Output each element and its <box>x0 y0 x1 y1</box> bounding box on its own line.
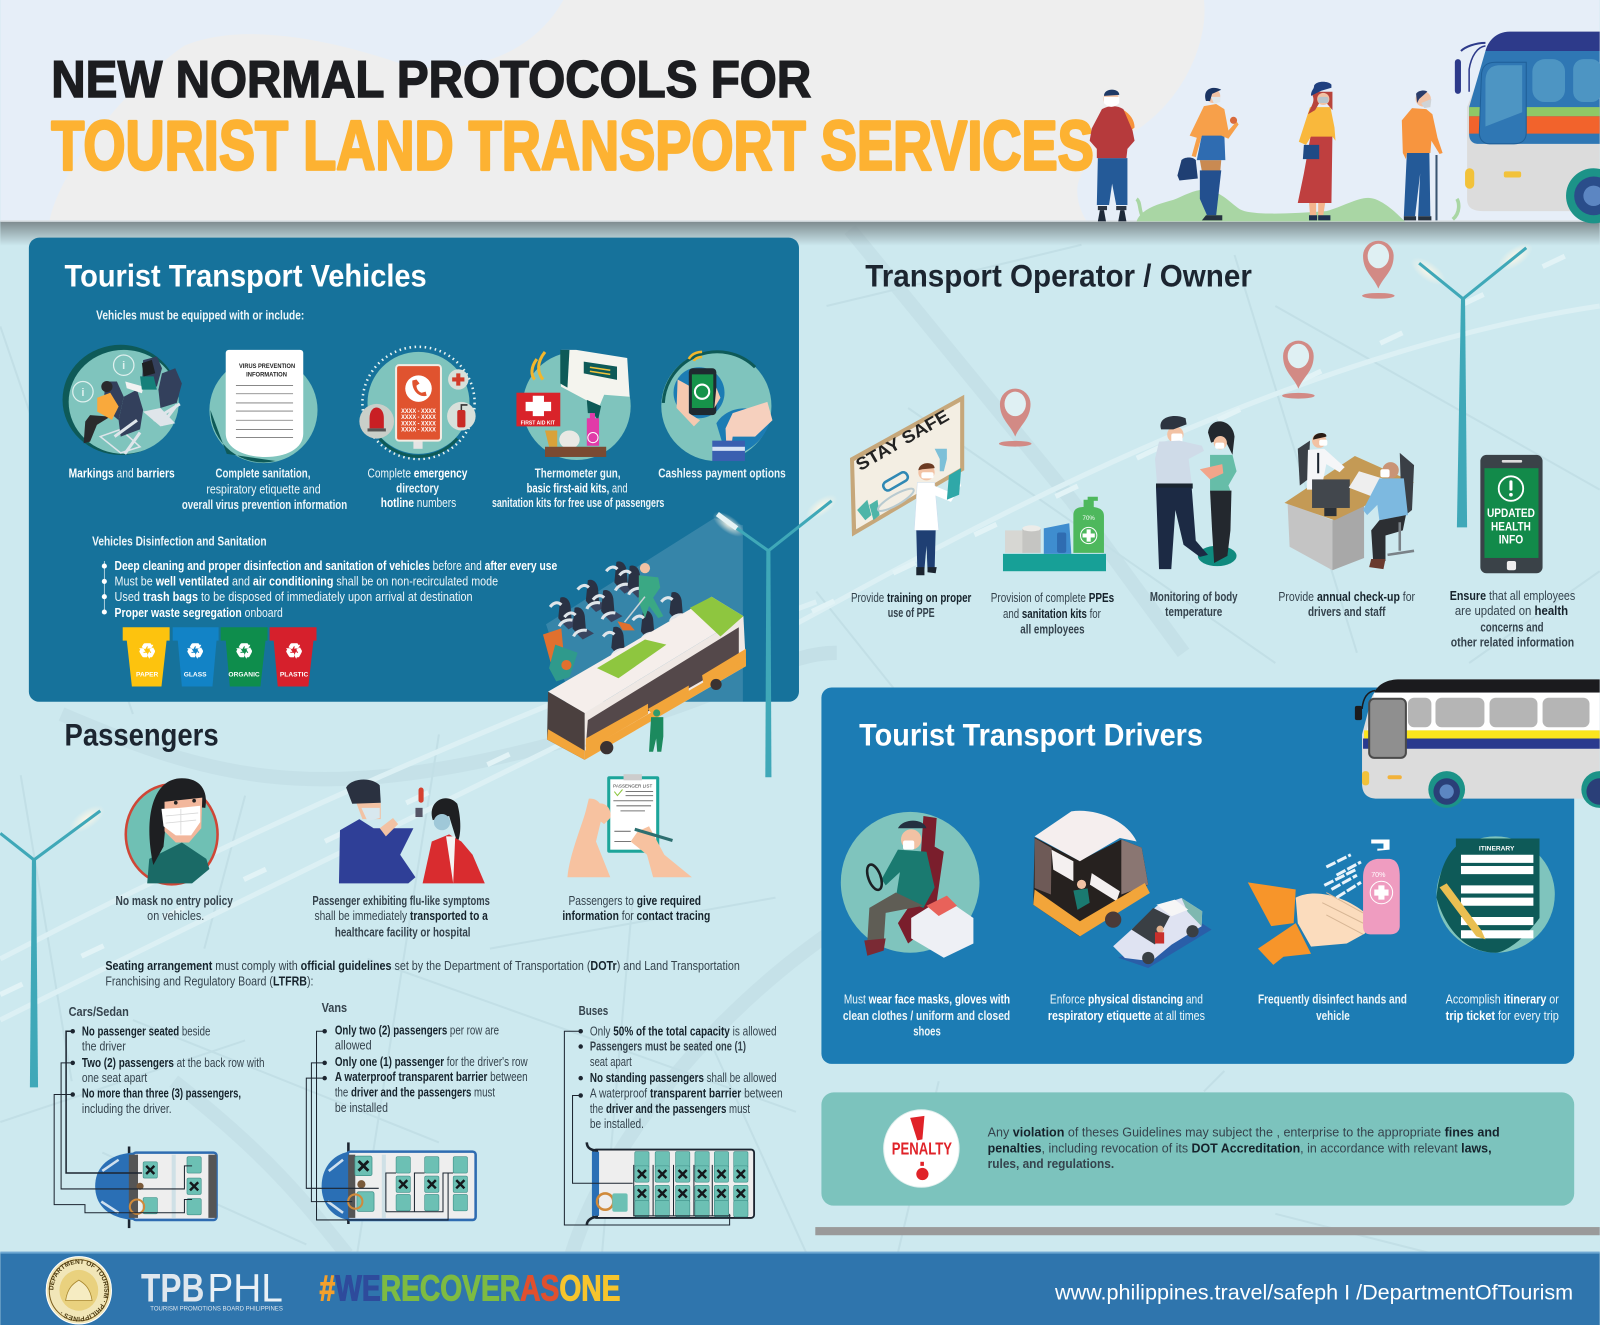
logo: TPB PHL: TPB <box>141 1267 204 1311</box>
logo: TPB PHL <box>141 1267 283 1313</box>
caption: thermometer: Thermometer gun, <box>535 466 620 480</box>
logo: TPB PHL: TOURISM PROMOTIONS BOARD PHILIPPINES <box>150 1306 283 1313</box>
caption: temperature: Monitoring of body <box>1150 590 1238 604</box>
text: seating arrangement: Seating arrangement must comply with official guidelines set by the Department of Transportation (DOTr) and Land Transportation <box>105 959 740 973</box>
person 3 <box>1298 82 1336 220</box>
text: penalty: penalties, including revocation of its DOT Accreditation, in accordance with relevant laws, <box>988 1142 1492 1156</box>
text: penalty: rules, and regulations. <box>988 1157 1114 1171</box>
rules: cars: No more than three (3) passengers, <box>82 1087 241 1101</box>
rules: buses: be installed. <box>590 1117 644 1131</box>
caption: check-up: drivers and staff <box>1308 605 1386 619</box>
rules: buses: Passengers must be seated one (1) <box>590 1040 746 1054</box>
heading: buses: Buses <box>579 1004 608 1018</box>
caption: contact tracing <box>562 894 710 923</box>
heading: drivers: Tourist Transport Drivers <box>859 717 1203 753</box>
rules: vans: Only two (2) passengers per row are <box>335 1023 499 1037</box>
text: seating arrangement <box>105 959 740 988</box>
icon: phone updated health info: HEALTH <box>1491 520 1531 533</box>
caption: temperature <box>1150 590 1238 619</box>
diagram: car seats <box>54 1029 217 1228</box>
bullet list: disinfection: Proper waste segregation onboard <box>115 606 283 620</box>
icon: markings and barriers <box>63 345 182 455</box>
rules: buses: A waterproof transparent barrier between <box>590 1087 783 1101</box>
icon: virus prevention sheet: INFORMATION <box>246 371 287 378</box>
icon: recycling bins: PLASTIC <box>280 671 308 678</box>
text: penalty: Any violation of theses Guidelines may subject the , enterprise to the appropriate fines and <box>988 1125 1500 1139</box>
rules: vans: Only one (1) passenger for the driver's row <box>335 1055 528 1069</box>
heading: cars: Cars/Sedan <box>69 1005 129 1019</box>
icon: PPE and sanitation kit <box>1003 497 1106 571</box>
heading: passengers: Passengers <box>65 717 219 753</box>
caption: training <box>851 591 971 620</box>
rules: buses: Only 50% of the total capacity is allowed <box>590 1024 777 1038</box>
person 4 <box>1402 90 1443 220</box>
caption: sanitation: respiratory etiquette and <box>206 483 321 497</box>
caption: flu symptoms <box>312 894 490 939</box>
caption: flu symptoms: Passenger exhibiting flu-like symptoms <box>312 894 490 908</box>
caption: sanitation: Complete sanitation, <box>216 466 310 480</box>
footer <box>0 1252 1600 1325</box>
icon: cutaway bus and car <box>1033 811 1212 968</box>
bullet list: disinfection: Must be well ventilated and air conditioning shall be on non-recirculated mode <box>115 574 498 588</box>
icon: itinerary: ITINERARY <box>1479 846 1515 853</box>
caption: itinerary: Accomplish itinerary or <box>1446 993 1559 1007</box>
icon: recycling bins: ♻ <box>138 641 156 663</box>
caption: disinfect: Frequently disinfect hands and <box>1258 993 1407 1007</box>
illustration: disinfecting iso bus and seats <box>543 561 746 760</box>
icon: emergency directory: XXXX - XXXX <box>401 414 436 421</box>
panel: penalty notice <box>821 1092 1574 1206</box>
heading: vehicles: Tourist Transport Vehicles <box>65 258 427 294</box>
caption: updated info: are updated on health <box>1455 604 1568 618</box>
cutaway bus <box>1033 811 1150 936</box>
icon: flu symptoms screening <box>339 780 485 883</box>
icon: recycling bins <box>123 627 317 686</box>
header band <box>0 0 1600 246</box>
icon: stay safe training board <box>850 395 964 575</box>
icon: contact tracing clipboard <box>567 774 692 877</box>
icon: recycling bins: ♻ <box>235 641 253 663</box>
caption: sanitation <box>182 466 347 512</box>
bullet list: disinfection: Deep cleaning and proper disinfection and sanitation of vehicles before and after every use <box>115 559 557 573</box>
caption: PPE <box>991 591 1114 636</box>
icon: temperature monitoring <box>1155 416 1237 569</box>
caption: check-up <box>1278 590 1415 619</box>
rules: cars: the driver <box>82 1040 126 1054</box>
icon: cashless payment <box>661 351 772 461</box>
diagram: van seats <box>306 1029 476 1224</box>
hashtag: #WERECOVERASONE <box>320 1269 620 1309</box>
icon: masked woman <box>126 778 218 884</box>
cleaner with mop <box>617 563 663 630</box>
caption: updated info: Ensure that all employees <box>1450 589 1575 603</box>
caption: PPE: all employees <box>1020 622 1085 636</box>
caption: masks <box>116 894 233 923</box>
caption: driver masks: shoes <box>913 1024 941 1038</box>
caption: driver masks: clean clothes / uniform and closed <box>843 1009 1010 1023</box>
bar: grey divider <box>815 1227 1600 1235</box>
icon: phone updated health info <box>1480 455 1543 573</box>
subheading: disinfection: Vehicles Disinfection and Sanitation <box>92 535 267 549</box>
car <box>1113 898 1212 968</box>
cleaner at door <box>649 709 663 752</box>
icon: annual check-up desk <box>1285 433 1414 570</box>
icon: emergency directory <box>359 347 476 459</box>
icon: recycling bins: PAPER <box>136 671 159 678</box>
title: NEW NORMAL PROTOCOLS FOR <box>51 51 811 109</box>
caption: flu symptoms: healthcare facility or hospital <box>335 925 471 939</box>
caption: check-up: Provide annual check-up for <box>1278 590 1415 604</box>
icon: recycling bins: ♻ <box>285 641 303 663</box>
caption: cashless: Cashless payment options <box>658 466 786 480</box>
column: cars and sedan <box>54 1005 265 1228</box>
icon: recycling bins: GLASS <box>184 671 207 678</box>
guard in blue <box>339 780 415 883</box>
icon: emergency directory: XXXX - XXXX <box>401 426 436 433</box>
icon: emergency directory: XXXX - XXXX <box>401 408 436 415</box>
person 2 <box>1177 88 1239 220</box>
doctor figure <box>914 463 961 575</box>
icon: virus prevention sheet: VIRUS PREVENTION <box>239 363 295 370</box>
title: TOURIST LAND TRANSPORT SERVICES <box>51 106 1094 184</box>
caption: distancing: Enforce physical distancing and <box>1050 993 1203 1007</box>
caption: training: Provide training on proper <box>851 591 971 605</box>
bullet list: disinfection <box>102 559 557 620</box>
heading: transport operator: Transport Operator / Owner <box>865 258 1252 294</box>
cleaning cart <box>543 628 578 681</box>
rules: vans <box>335 1023 528 1115</box>
heading: vans: Vans <box>322 1001 347 1015</box>
doctor seated <box>1298 433 1345 490</box>
caption: thermometer: basic first-aid kits, and <box>527 482 628 496</box>
caption: flu symptoms: shall be immediately transported to a <box>314 909 489 923</box>
panel: tourist transport vehicles <box>29 238 799 702</box>
caption: contact tracing: information for contact tracing <box>562 909 710 923</box>
caption: disinfect <box>1258 993 1407 1023</box>
icon: hand sanitizer and hands <box>1248 839 1400 965</box>
icon: virus prevention sheet <box>209 350 318 463</box>
woman <box>1200 421 1237 563</box>
icon: penalty badge <box>884 1110 959 1187</box>
rules: vans: be installed <box>335 1101 388 1115</box>
icon: contact tracing clipboard: PASSENGER LIST <box>613 783 652 788</box>
icon: markings and barriers: i <box>81 387 84 399</box>
person 1 <box>1090 90 1135 221</box>
caption: updated info <box>1450 589 1575 650</box>
icon: map pins and street lamp <box>999 238 1537 527</box>
caption: distancing <box>1048 993 1205 1023</box>
column: vans <box>306 1001 528 1224</box>
bus body <box>547 597 746 760</box>
caption: masks: No mask no entry policy <box>116 894 233 908</box>
caption: thermometer: sanitation kits for free use of passengers <box>492 496 664 510</box>
caption: sanitation: overall virus prevention information <box>182 498 347 512</box>
icon: thermometer and kits: FIRST AID KIT <box>521 420 556 426</box>
rules: vans: A waterproof transparent barrier between <box>335 1070 528 1084</box>
caption: PPE: and sanitation kits for <box>1003 607 1101 621</box>
rules: cars: one seat apart <box>82 1071 148 1085</box>
icon: phone updated health info: UPDATED <box>1487 507 1535 520</box>
caption: markings: Markings and barriers <box>69 466 175 480</box>
rules: cars: No passenger seated beside <box>82 1024 210 1038</box>
rules: buses <box>590 1024 783 1131</box>
street lamp: vehicles panel <box>546 490 841 777</box>
icon: hand sanitizer and hands: 70% <box>1371 871 1386 879</box>
panel: tourist transport drivers <box>821 679 1600 1064</box>
street lamp: passengers <box>0 800 109 1087</box>
icon: recycling bins: ♻ <box>186 641 204 663</box>
caption: emergency: directory <box>396 482 439 496</box>
caption: temperature: temperature <box>1165 605 1222 619</box>
woman in red <box>423 798 485 883</box>
text: seating arrangement: Franchising and Regulatory Board (LTFRB): <box>105 974 313 988</box>
title <box>51 51 1094 184</box>
caption: contact tracing: Passengers to give required <box>568 894 701 908</box>
caption: itinerary: trip ticket for every trip <box>1446 1009 1559 1023</box>
rules: cars <box>82 1024 265 1116</box>
icon: markings and barriers: i <box>122 360 125 372</box>
icon: phone updated health info: INFO <box>1499 534 1523 547</box>
icon: driver <box>841 812 980 958</box>
caption: updated info: concerns and <box>1480 620 1544 634</box>
text: penalty <box>988 1125 1500 1171</box>
bus <box>1455 32 1600 223</box>
bullet list: disinfection: Used trash bags to be disposed of immediately upon arrival at destination <box>115 590 473 604</box>
rules: cars: including the driver. <box>82 1102 172 1116</box>
caption: driver masks <box>843 993 1010 1038</box>
rules: buses: seat apart <box>590 1055 632 1069</box>
illustration: white bus <box>1355 679 1600 808</box>
rules: buses: the driver and the passengers must <box>590 1102 750 1116</box>
intro text: Vehicles must be equipped with or include: <box>96 308 304 322</box>
client seated <box>1363 453 1414 569</box>
rules: vans: the driver and the passengers must <box>335 1086 495 1100</box>
guard <box>1155 416 1208 569</box>
caption: emergency: hotline numbers <box>381 496 456 510</box>
illustration: passengers waiting for bus <box>1090 32 1600 223</box>
rules: buses: No standing passengers shall be allowed <box>590 1071 777 1085</box>
column: buses <box>564 1004 783 1225</box>
caption: thermometer <box>492 466 664 510</box>
icon: penalty badge: PENALTY <box>892 1139 952 1159</box>
caption: training: use of PPE <box>888 606 935 620</box>
rules: cars: Two (2) passengers at the back row with <box>82 1056 265 1070</box>
icon: recycling bins: ORGANIC <box>228 671 260 678</box>
caption: updated info: other related information <box>1451 636 1574 650</box>
caption: emergency: Complete emergency <box>368 466 467 480</box>
icon: thermometer and kits <box>516 350 631 460</box>
logo: department of tourism seal: DEPARTMENT OF TOURISM · PHILIPPINES · <box>48 1259 109 1322</box>
diagram: bus seats <box>564 1029 754 1225</box>
caption: masks: on vehicles. <box>147 909 204 923</box>
caption: distancing: respiratory etiquette at all times <box>1048 1009 1205 1023</box>
logo: TPB PHL: PHL <box>207 1267 283 1311</box>
caption: driver masks: Must wear face masks, gloves with <box>844 993 1010 1007</box>
caption: disinfect: vehicle <box>1316 1009 1350 1023</box>
caption: PPE: Provision of complete PPEs <box>991 591 1114 605</box>
caption: emergency <box>368 466 467 510</box>
icon: PPE and sanitation kit: 70% <box>1083 515 1095 522</box>
caption: itinerary <box>1446 993 1559 1023</box>
website: www.philippines.travel/safeph I /DepartmentOfTourism <box>1054 1280 1573 1304</box>
icon: stay safe training board: STAY SAFE <box>852 405 952 475</box>
icon: itinerary <box>1436 836 1555 953</box>
seats being cleaned <box>543 561 691 681</box>
icon: emergency directory: XXXX - XXXX <box>401 420 436 427</box>
rules: vans: allowed <box>335 1039 372 1053</box>
